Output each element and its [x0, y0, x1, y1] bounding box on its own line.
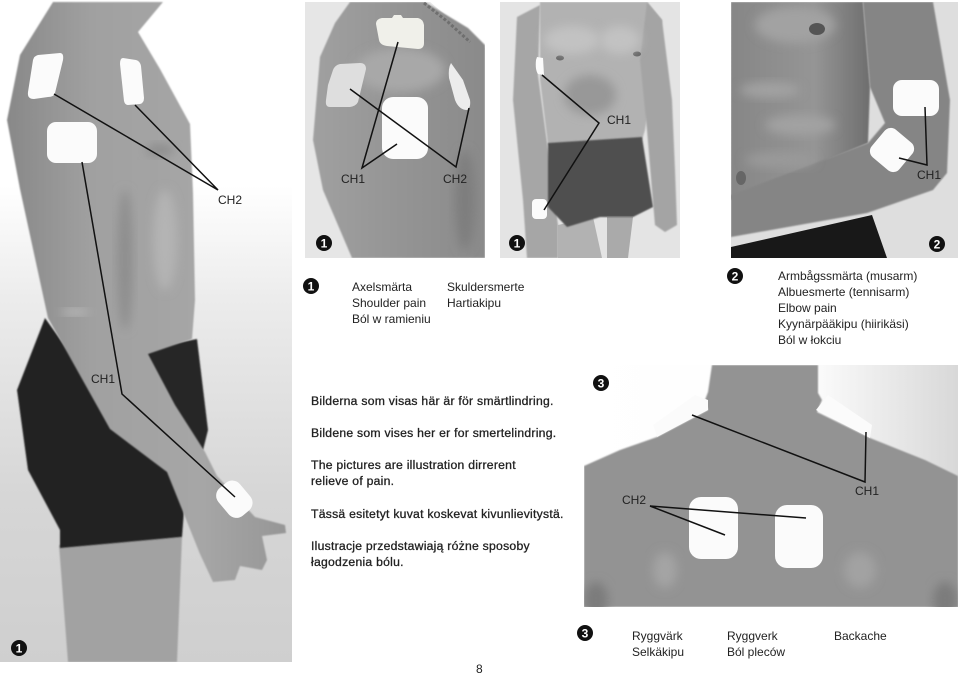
photo panel: front view with arm electrodes — [500, 2, 680, 258]
number badge 2: 2 — [934, 238, 941, 252]
number badge 1 — [11, 640, 27, 656]
multilingual note — [311, 394, 564, 569]
shoulder pain caption: Hartiakipu — [447, 296, 501, 310]
label CH2: CH2 — [218, 193, 242, 207]
label CH1: CH1 — [917, 168, 941, 182]
backache caption: Selkäkipu — [632, 645, 684, 659]
multilingual note: relieve of pain. — [311, 474, 394, 488]
panel: back view with shoulder electrodes — [584, 365, 958, 618]
photo panel: side view with arm and shoulder electrodes — [0, 0, 292, 662]
backache caption — [577, 625, 887, 659]
elbow pain caption: Armbågssmärta (musarm) — [778, 269, 917, 283]
backache caption: Backache — [834, 629, 887, 643]
elbow pain caption: Albuesmerte (tennisarm) — [778, 285, 909, 299]
label CH1: CH1 — [341, 172, 365, 186]
number badge 1 — [316, 235, 332, 251]
electrode pads — [532, 57, 547, 219]
number badge 3: 3 — [598, 376, 605, 390]
number badge 3 — [593, 375, 609, 391]
backache caption: Ryggvärk — [632, 629, 684, 643]
multilingual note: łagodzenia bólu. — [311, 555, 404, 569]
shoulder pain caption: Shoulder pain — [352, 296, 426, 310]
label CH1: CH1 — [91, 372, 115, 386]
shoulder pain caption: Ból w ramieniu — [352, 312, 431, 326]
number badge 1: 1 — [514, 236, 521, 250]
electrode pads — [653, 395, 872, 568]
electrode pads — [326, 15, 470, 159]
multilingual note: Ilustracje przedstawiają różne sposoby — [311, 539, 530, 553]
label CH1: CH1 — [855, 484, 879, 498]
elbow pain caption: Kyynärpääkipu (hiirikäsi) — [778, 317, 909, 331]
backache caption: Ból pleców — [727, 645, 785, 659]
electrode pads — [28, 53, 257, 522]
connection lines — [54, 94, 235, 497]
multilingual note: Tässä esitetyt kuvat koskevat kivunlievitystä. — [311, 507, 564, 521]
shoulder pain caption — [303, 278, 525, 326]
multilingual note: Bildene som vises her er for smertelindring. — [311, 426, 556, 440]
connection lines — [350, 42, 469, 168]
label CH2: CH2 — [443, 172, 467, 186]
necklace — [424, 3, 470, 42]
number badge 1: 1 — [321, 236, 328, 250]
electrode pads — [867, 80, 939, 175]
label CH2: CH2 — [622, 493, 646, 507]
elbow pain caption: Elbow pain — [778, 301, 837, 315]
shorts — [548, 137, 653, 227]
connection lines — [899, 107, 927, 165]
multilingual note: The pictures are illustration dirrerent — [311, 458, 516, 472]
elbow pain caption — [727, 268, 917, 347]
elbow pain caption: 2 — [732, 270, 739, 284]
shoulder pain caption: Skuldersmerte — [447, 280, 525, 294]
backache caption: 3 — [582, 626, 589, 640]
elbow pain caption: Ból w łokciu — [778, 333, 841, 347]
number badge 2 — [929, 236, 945, 252]
connection lines — [650, 415, 866, 535]
label CH1: CH1 — [607, 113, 631, 127]
photo panel: elbow electrodes — [731, 2, 958, 258]
number badge 1 — [509, 235, 525, 251]
shoulder pain caption: 1 — [308, 280, 315, 294]
multilingual note: Bilderna som visas här är för smärtlindring. — [311, 394, 554, 408]
backache caption: Ryggverk — [727, 629, 779, 643]
connection lines — [542, 75, 599, 210]
shoulder pain caption: Axelsmärta — [352, 280, 412, 294]
number badge 1: 1 — [16, 642, 23, 656]
photo panel: shoulder back view — [305, 2, 485, 258]
